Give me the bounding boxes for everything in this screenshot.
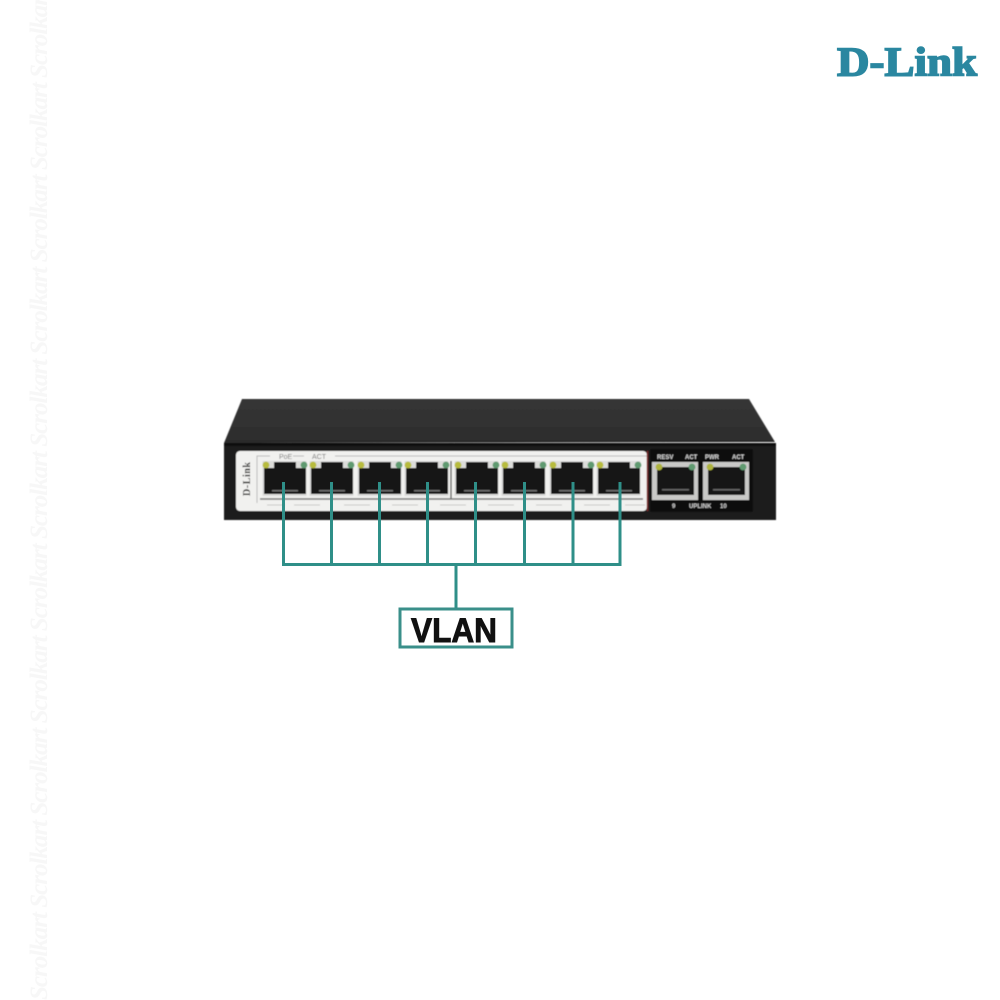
port 5 <box>454 461 499 496</box>
switch top face <box>224 399 775 443</box>
uplink section dark frame <box>650 449 753 512</box>
port 1 <box>262 461 307 496</box>
uplink labels bottom: UPLINK <box>689 504 712 510</box>
switch front face <box>224 443 776 520</box>
uplink labels top: RESV <box>657 455 673 461</box>
uplink labels top: ACT <box>732 455 745 461</box>
RJ45 port row <box>262 461 641 496</box>
brand label on panel: D-Link <box>242 462 253 496</box>
uplink labels top <box>657 455 745 461</box>
red panel divider <box>646 451 648 511</box>
uplink labels top: ACT <box>685 455 698 461</box>
port group outline <box>257 456 647 503</box>
logo: D-Link: D-Link <box>837 38 977 84</box>
uplink port 10 <box>703 462 749 500</box>
uplink labels top: PWR <box>705 455 720 461</box>
port 6 <box>502 461 546 496</box>
uplink ports <box>652 462 749 500</box>
VLAN text: VLAN <box>411 612 497 650</box>
uplink labels bottom: 10 <box>720 504 727 510</box>
port 2 <box>310 461 354 496</box>
port 4 <box>404 461 449 496</box>
front white panel <box>236 451 647 511</box>
uplink labels bottom <box>672 504 727 510</box>
port 7 <box>550 461 594 496</box>
PoE label: PoE <box>279 454 293 461</box>
port 3 <box>358 461 402 496</box>
teal VLAN connection lines <box>284 482 620 608</box>
ACT label: ACT <box>312 454 327 461</box>
VLAN label box <box>400 609 512 650</box>
watermark: vertical Scrolkart text: Scrolkart Scrolkart Scrolkart Scrolkart Scrolkart Scrolkart Scrolkart Scrolkart Scrolkart Scrolkart Scrolkart <box>26 0 53 1000</box>
uplink port 9 <box>652 462 698 500</box>
uplink labels bottom: 9 <box>672 504 676 510</box>
network switch <box>224 399 776 520</box>
port 8 <box>596 461 641 496</box>
box outline <box>400 609 512 647</box>
